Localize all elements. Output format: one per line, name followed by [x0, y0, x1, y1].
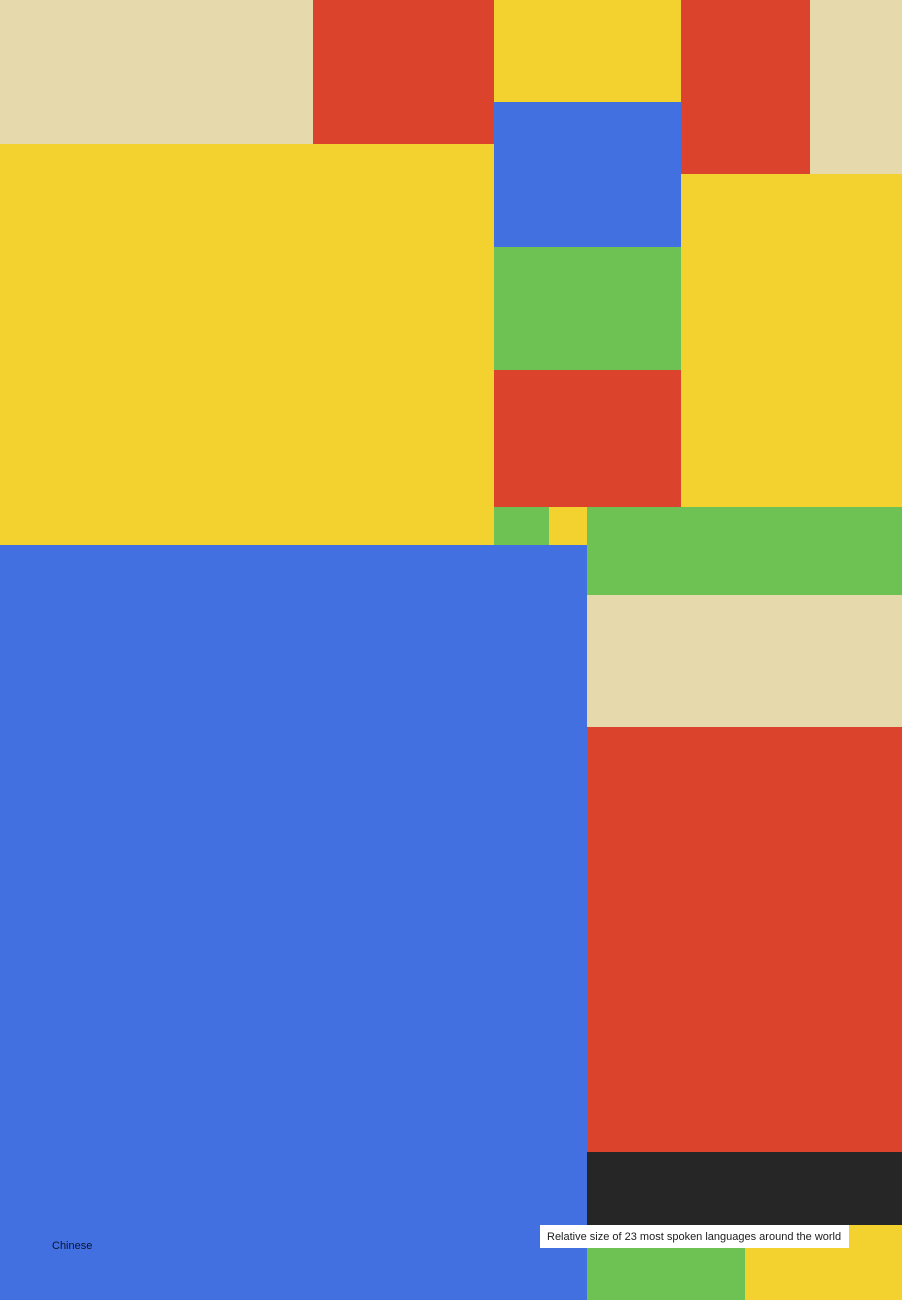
tile: blue centre — [494, 102, 681, 247]
tile: red top right — [681, 0, 810, 174]
tile: yellow right — [681, 174, 902, 507]
tile: yellow bottom — [745, 1225, 902, 1300]
caption: Relative size of 23 most spoken languages around the world — [547, 1231, 841, 1243]
tile: red top — [313, 0, 494, 144]
tile: beige right — [587, 595, 902, 727]
tile: large yellow — [0, 144, 494, 545]
caption — [540, 1225, 849, 1248]
tile: yellow top centre — [494, 0, 681, 102]
tile: small yellow — [549, 507, 587, 545]
tile: red centre — [494, 370, 681, 507]
label: Chinese: Chinese — [52, 1240, 92, 1252]
tile: beige top left — [0, 0, 313, 144]
tile: small green — [494, 507, 549, 545]
tile: green right — [587, 507, 902, 595]
tile: beige top right — [810, 0, 902, 174]
tile: black — [587, 1152, 902, 1225]
tile: Chinese large blue — [0, 545, 587, 1300]
tile: large red right — [587, 727, 902, 1152]
tile: green centre — [494, 247, 681, 370]
tile: green bottom — [587, 1225, 745, 1300]
